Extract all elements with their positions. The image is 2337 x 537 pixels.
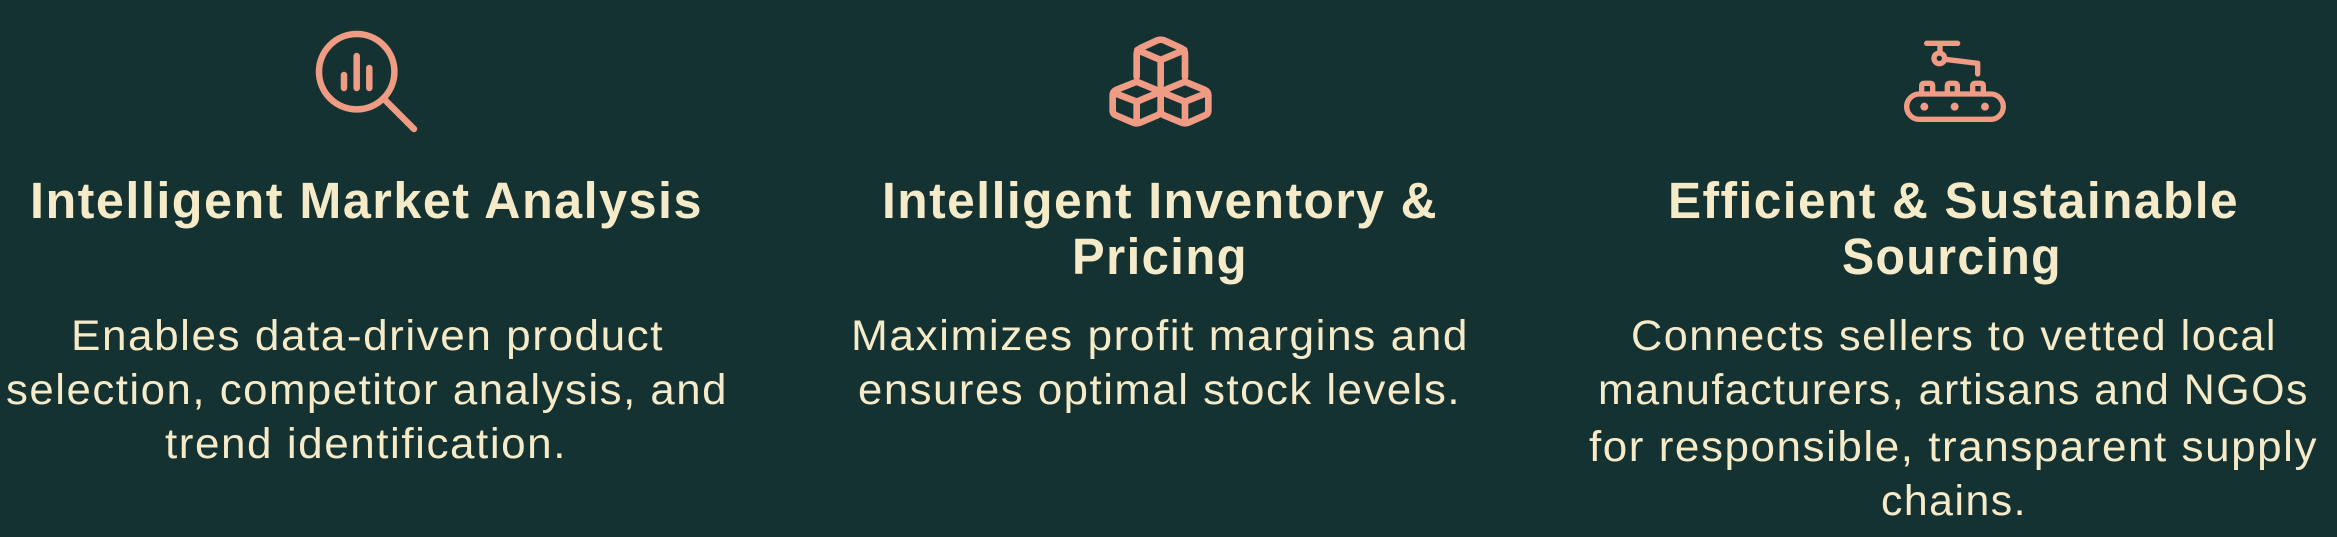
heading: intelligent market analysis: Intelligent Market Analysis — [30, 172, 703, 229]
text block: inventory description: Maximizes profit margins and — [851, 312, 1469, 360]
heading: efficient and sustainable sourcing: Sourcing — [1842, 228, 2062, 285]
heading: efficient and sustainable sourcing — [1668, 172, 2239, 285]
panel: intelligent market analysis — [6, 34, 728, 468]
text block: sourcing description: Connects sellers to vetted local — [1631, 312, 2277, 360]
icon: conveyor belt with robotic arm — [1907, 43, 2003, 119]
text block: sourcing description: for responsible, transparent supply — [1589, 423, 2318, 471]
text block: sourcing description: manufacturers, artisans and NGOs — [1598, 366, 2309, 414]
text block: sourcing description — [1589, 312, 2318, 525]
heading: intelligent inventory and pricing: Intelligent Inventory & — [882, 172, 1438, 229]
text block: inventory description — [851, 312, 1469, 414]
panel: intelligent inventory and pricing — [851, 40, 1469, 414]
icon: stacked cubes — [1113, 40, 1208, 123]
text block: sourcing description: chains. — [1881, 477, 2027, 525]
panel: efficient and sustainable sourcing — [1589, 43, 2318, 525]
text block: market analysis description: Enables data-driven product — [71, 312, 664, 360]
text block: market analysis description: trend identification. — [165, 420, 567, 468]
text block: market analysis description: selection, competitor analysis, and — [6, 366, 728, 414]
heading: efficient and sustainable sourcing: Efficient & Sustainable — [1668, 172, 2239, 229]
icon: magnifying glass with bar chart — [319, 34, 414, 129]
text block: market analysis description — [6, 312, 728, 468]
text block: inventory description: ensures optimal stock levels. — [858, 366, 1461, 414]
heading: intelligent inventory and pricing: Pricing — [1072, 228, 1248, 285]
heading: intelligent inventory and pricing — [882, 172, 1438, 285]
